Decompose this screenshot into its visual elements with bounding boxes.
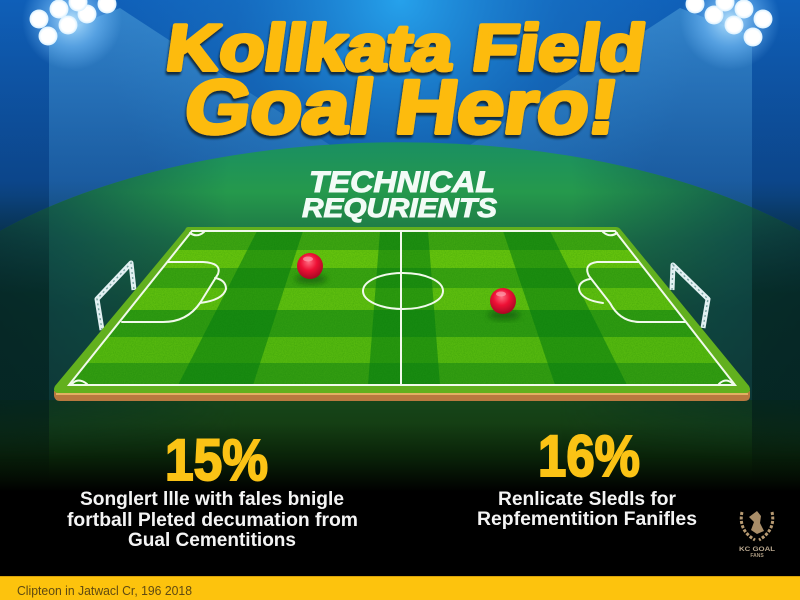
pitch markings [69,231,735,385]
pitch base edge [54,391,750,401]
emblem: KC GOAL [739,546,775,553]
title: Kollkata Field [162,11,650,84]
stat description: left: fortball Pleted decumation from [67,510,358,531]
pitch border [54,227,750,393]
stat: 15%: 15% [165,428,268,493]
left goal [97,263,134,330]
football pitch [40,225,760,401]
stat: 16% [477,424,697,530]
footer bar: Clipteon in Jatwacl Cr, 196 2018 [17,583,192,598]
floodlight: right [680,0,780,70]
emblem: FANS [750,553,764,559]
title: Goal Hero! [180,65,624,150]
footer bar [0,576,800,600]
subheading: technical requirements [302,166,497,223]
goal side strips [102,289,139,335]
stat description: left: Gual Cementitions [128,530,296,551]
stat description: right: Repfementition Fanifles [477,509,697,530]
floodlight: left [22,0,122,70]
title [162,11,650,150]
emblem [739,511,775,559]
stat description: right: Renlicate Sledls for [498,489,677,510]
ball: left [295,253,327,284]
stat: 16%: 16% [538,424,640,489]
stat: 15% [67,428,358,551]
turf [72,232,732,384]
stat description: right [477,489,697,530]
stat description: left [67,489,358,551]
right light beam [470,8,752,240]
green dome [0,142,800,402]
right goal [672,265,708,328]
left light beam [49,8,330,240]
subheading: technical requirements: TECHNICAL [309,166,495,199]
stat description: left: Songlert llle with fales bnigle [80,489,344,510]
subheading: technical requirements: REQURIENTS [302,193,497,223]
ball: right [488,288,520,320]
